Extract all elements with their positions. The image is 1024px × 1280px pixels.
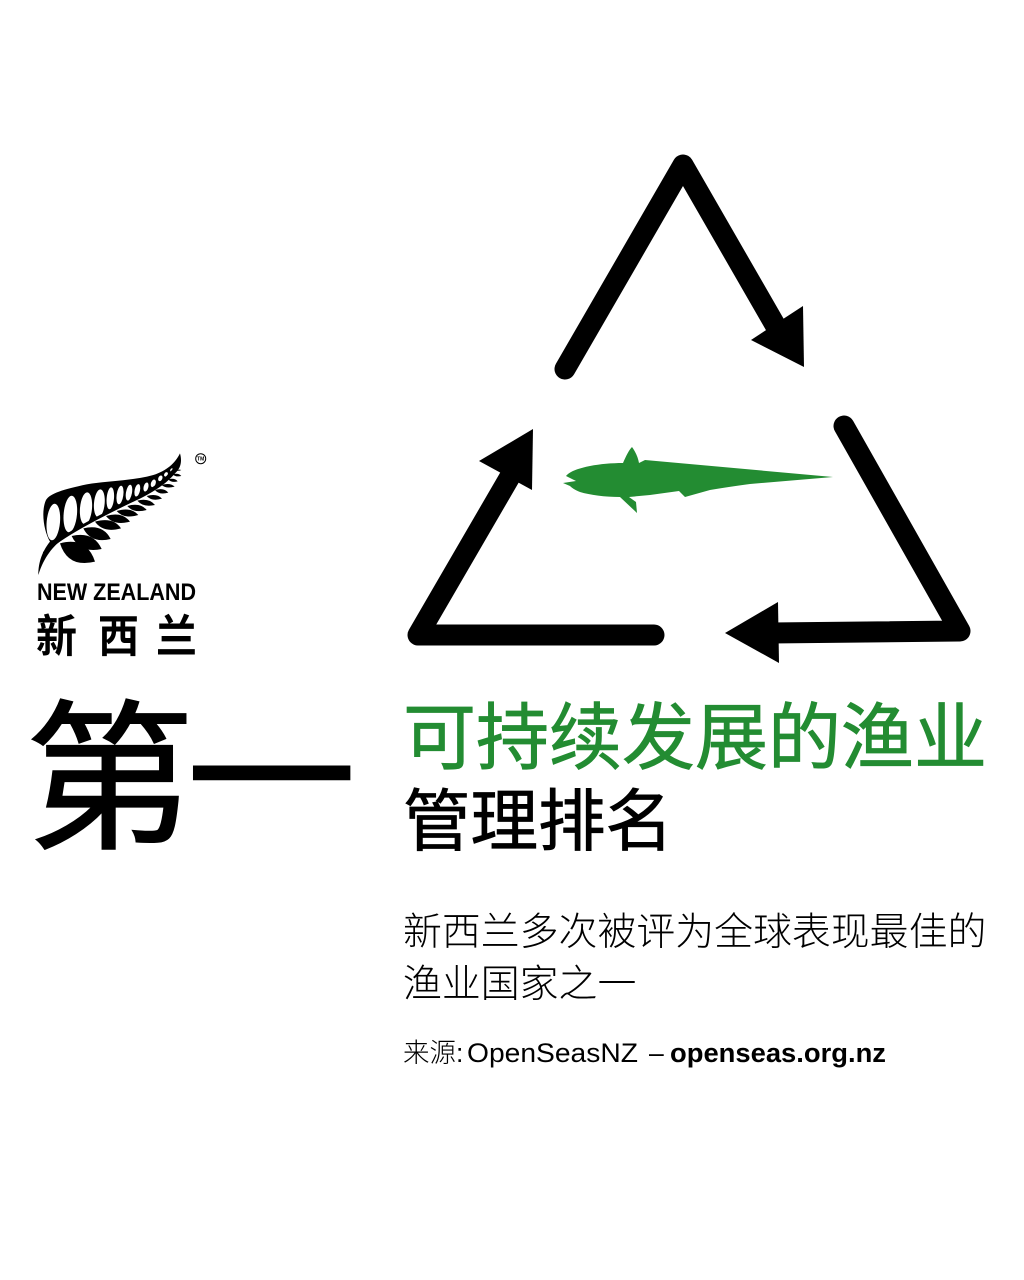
source line: –	[649, 1038, 664, 1068]
arrow: top	[565, 165, 804, 369]
icon: green fish	[563, 447, 833, 513]
heading: green: 可持续发展的渔业	[403, 679, 987, 785]
description text: 新西兰多次被评为全球表现最佳的	[403, 911, 986, 954]
big stat: 第一: 第一	[25, 648, 356, 883]
icon: trademark	[196, 454, 206, 464]
icon: silver fern	[38, 453, 181, 575]
icon: trademark: TM	[197, 456, 204, 462]
recycling triangle of arrows	[418, 165, 960, 663]
logo wordmark: Chinese: 新西兰	[36, 612, 197, 662]
description text: 渔业国家之一	[403, 963, 636, 1006]
arrow: right	[725, 426, 960, 663]
arrow: left	[418, 429, 654, 635]
source line: OpenSeasNZ	[467, 1038, 638, 1068]
source line	[403, 1038, 886, 1068]
heading: black: 管理排名	[403, 768, 673, 865]
logo: New Zealand fern mark	[36, 453, 206, 662]
source line: 来源:	[403, 1038, 463, 1068]
logo wordmark: NEW ZEALAND: NEW ZEALAND	[37, 579, 196, 606]
description text	[403, 911, 986, 1006]
source line: openseas.org.nz	[670, 1038, 886, 1068]
